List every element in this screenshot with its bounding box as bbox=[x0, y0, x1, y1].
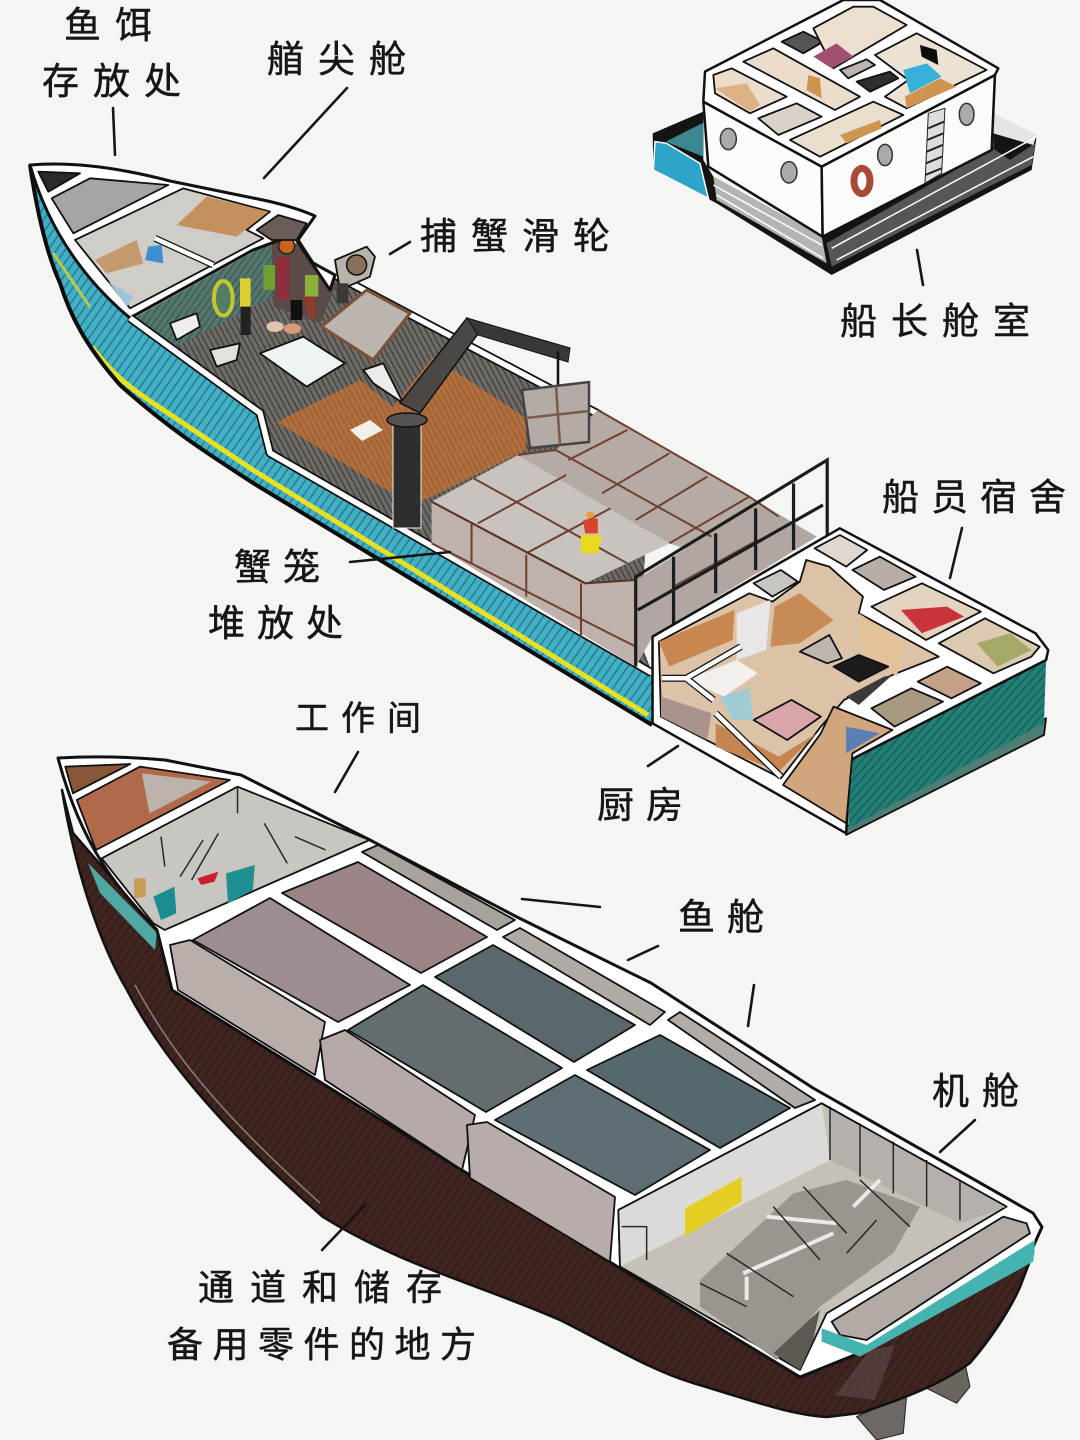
label: crab pot stack bbox=[208, 547, 450, 644]
label: captain's cabin: 船长舱室 bbox=[840, 301, 1044, 342]
label: kitchen: 厨房 bbox=[597, 785, 695, 826]
side of front pots bbox=[432, 502, 636, 667]
rear pots bbox=[518, 410, 817, 573]
label: crew quarters bbox=[882, 477, 1078, 578]
label: passage and spare parts storage bbox=[167, 1205, 486, 1365]
bait hold bbox=[65, 764, 130, 793]
stairwell bbox=[783, 707, 892, 823]
label: captain's cabin bbox=[840, 250, 1044, 342]
crew figures bbox=[240, 238, 318, 335]
cargo hatch wood deck bbox=[277, 357, 526, 500]
top ship illustration bbox=[30, 164, 1048, 835]
label: crab pulley: 捕蟹滑轮 bbox=[420, 216, 624, 257]
top ship hull bbox=[30, 165, 652, 725]
label: engine room bbox=[932, 1071, 1032, 1152]
label: engine room: 机舱 bbox=[932, 1071, 1032, 1112]
pots behind railing bbox=[636, 503, 817, 667]
bottom ship hull bbox=[62, 790, 1033, 1417]
fish tanks bbox=[193, 862, 790, 1195]
engine room bbox=[618, 1103, 1007, 1370]
internal white walls bbox=[662, 647, 781, 777]
crab pulley bbox=[335, 247, 375, 303]
label: crab pot stack: 堆放处 bbox=[208, 603, 355, 644]
main living area bbox=[659, 560, 939, 778]
stern compartment bbox=[832, 1217, 1030, 1340]
stern teal band bbox=[822, 1240, 1035, 1357]
cabin walls bbox=[703, 75, 995, 237]
workshop bbox=[102, 787, 370, 930]
forepeak cap with compartments bbox=[30, 164, 335, 318]
label: forepeak: 艏尖舱 bbox=[267, 39, 420, 80]
bottom ship deck roof bbox=[58, 757, 1042, 1377]
top of front pots bbox=[432, 455, 669, 583]
cabin roof with rooms bbox=[703, 0, 998, 167]
stern plinth bbox=[846, 718, 1046, 835]
bottom ship illustration bbox=[58, 757, 1042, 1440]
label: fish hold: 鱼舱 bbox=[678, 897, 776, 938]
top ship deck floor bbox=[133, 250, 652, 673]
small rooms bbox=[754, 535, 1040, 727]
label: crab pot stack: 蟹笼 bbox=[234, 547, 332, 588]
life ring bbox=[214, 281, 233, 316]
label: passage and spare parts storage: 通道和储存 bbox=[198, 1267, 458, 1308]
label: bait storage: 存放处 bbox=[42, 61, 195, 102]
side passages bbox=[170, 940, 615, 1262]
hanging crab pot bbox=[522, 382, 589, 448]
bottom ship rudder bbox=[857, 1363, 970, 1440]
block roof bbox=[653, 528, 1048, 833]
railing frame bbox=[636, 460, 827, 667]
stern engine room bbox=[618, 1103, 1035, 1370]
sorting table bbox=[260, 337, 345, 387]
captain's cabin illustration bbox=[653, 0, 1037, 275]
label: forepeak bbox=[264, 39, 420, 178]
side corridors bbox=[362, 845, 815, 1108]
deck white edge bbox=[130, 318, 652, 673]
label: fish hold bbox=[522, 897, 776, 1026]
label: bait storage bbox=[42, 5, 195, 155]
label: passage and spare parts storage: 备用零件的地方 bbox=[167, 1324, 486, 1365]
deck equipment bbox=[133, 238, 410, 403]
rim along deck bbox=[335, 275, 600, 415]
hatch cover bbox=[322, 290, 410, 360]
crew member on pots bbox=[581, 512, 602, 553]
stern wall bbox=[848, 660, 1046, 828]
bow compartments and workshop bbox=[65, 764, 370, 930]
crane bbox=[387, 318, 589, 528]
label: bait storage: 鱼饵 bbox=[64, 5, 166, 46]
cabin platform bbox=[653, 112, 1037, 275]
label: workshop: 工作间 bbox=[295, 700, 433, 738]
crab pots stack bbox=[432, 410, 817, 667]
forepeak hold bbox=[77, 767, 230, 850]
label: workshop bbox=[295, 700, 433, 792]
deck boxes bbox=[170, 313, 200, 340]
crew quarters block bbox=[653, 528, 1048, 835]
label: crew quarters: 船员宿舍 bbox=[882, 477, 1078, 518]
label: kitchen bbox=[597, 746, 695, 826]
